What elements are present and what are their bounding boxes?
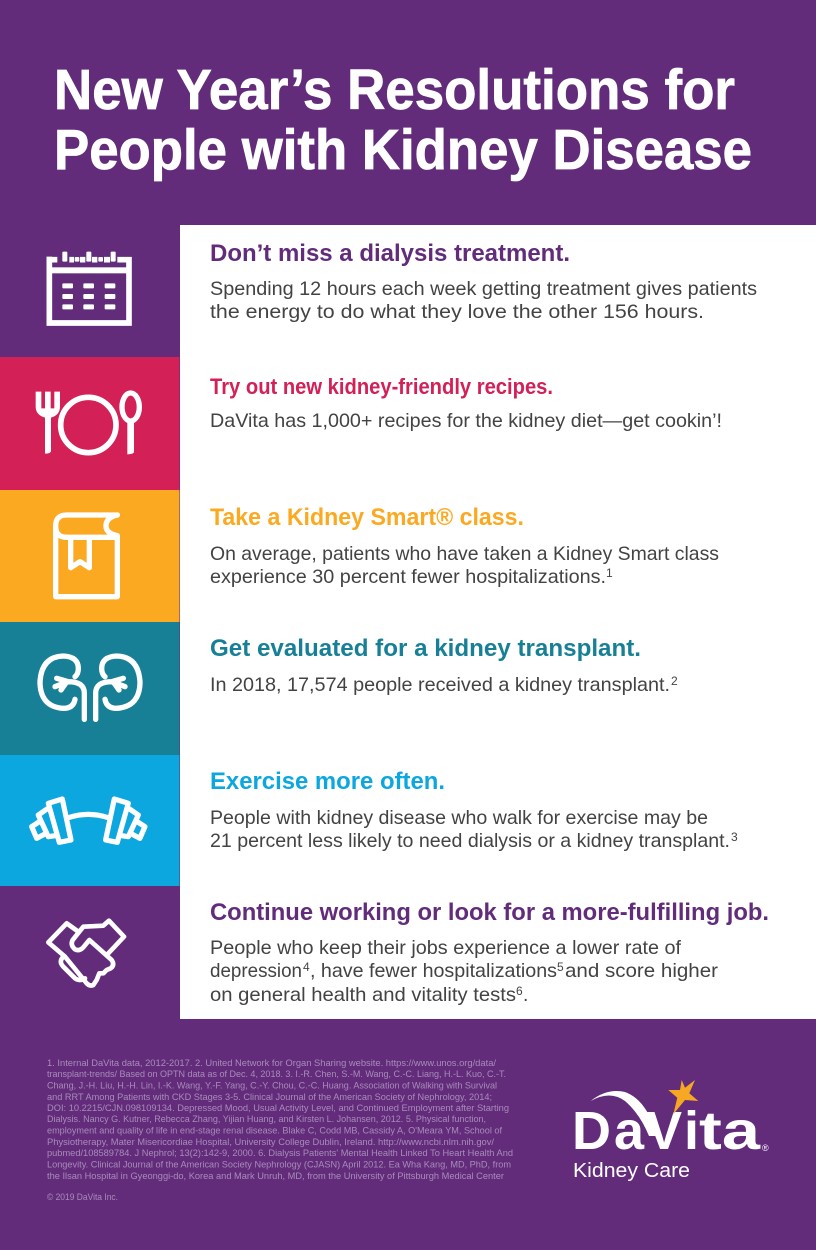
text: continue working: 5	[557, 960, 564, 974]
title: New Year’s Resolutions for	[54, 58, 735, 122]
footnotes: and RRT Among Patients with CKD Stages 3-5. Clinical Journal of the American Society of Nephrology, 2014;	[47, 1091, 492, 1102]
text: exercise more often: People with kidney disease who walk for exercise may be	[210, 808, 708, 829]
text: don't miss a dialysis treatment: the energy to do what they love the other 156 hours.	[210, 302, 704, 323]
footnotes: employment and quality of life in end-stage renal disease. Blake C, Codd MB, Cassidy A, O'Meara YM, School of	[47, 1124, 502, 1136]
text: kidney smart class: experience 30 percent fewer hospitalizations.	[210, 567, 606, 588]
icon: dumbbell	[32, 799, 145, 842]
text: kidney transplant: In 2018, 17,574 people received a kidney transplant.	[210, 675, 670, 696]
text: continue working	[210, 899, 769, 1006]
text: kidney-friendly recipes	[210, 374, 722, 432]
text: kidney smart class: Take a Kidney Smart® class.	[210, 504, 524, 531]
title	[54, 58, 752, 182]
text: continue working: and score higher	[565, 961, 719, 982]
logo: DaVita Kidney Care: ®	[762, 1143, 769, 1153]
text: continue working: 6	[516, 984, 523, 998]
footnotes: Dialysis. Nancy G. Kutner, Rebecca Zhang, Yijian Huang, and Kirsten L. Johansen, 2012. 5. Physical function,	[47, 1113, 486, 1124]
footnotes: Chang, J.-H. Liu, H.-H. Lin, I.-K. Wang, Y.-F. Yang, C.-Y. Chou, C.-C. Huang. Association of Walking with Survival	[47, 1080, 497, 1090]
footnotes: transplant-trends/ Based on OPTN data as of Dec. 4, 2018. 3. I.-R. Chen, S.-M. Wang, C.-C. Liang, H.-L. Kuo, C.-T.	[47, 1068, 506, 1079]
text: exercise more often: 21 percent less likely to need dialysis or a kidney transplant.	[210, 831, 730, 852]
logo: DaVita Kidney Care: D	[572, 1101, 611, 1161]
logo star	[668, 1080, 698, 1114]
text: continue working: depression	[210, 961, 302, 982]
text: don't miss a dialysis treatment: Spending 12 hours each week getting treatment gives patients	[210, 279, 757, 300]
icon: book	[56, 515, 117, 597]
footnotes: Physiotherapy, Mater Misericordiae Hospital, University College Dublin, Ireland. http://www.ncbi.nlm.nih.gov/	[47, 1136, 494, 1147]
text: kidney smart class: On average, patients who have taken a Kidney Smart class	[210, 544, 719, 565]
text: exercise more often: Exercise more often.	[210, 768, 445, 795]
icon: handshake	[48, 921, 124, 986]
text: kidney smart class	[210, 504, 719, 588]
text: kidney transplant: 2	[671, 674, 678, 688]
icon: kidneys	[40, 656, 140, 719]
text: continue working: People who keep their jobs experience a lower rate of	[210, 938, 682, 959]
text: kidney transplant	[210, 635, 678, 696]
logo swoosh	[591, 1091, 657, 1136]
text: don't miss a dialysis treatment	[210, 240, 757, 323]
text: continue working: 4	[303, 960, 310, 974]
icon: plate and cutlery	[36, 392, 139, 454]
text: exercise more often: 3	[731, 830, 738, 844]
logo: DaVita Kidney Care: i	[684, 1101, 699, 1161]
footnotes: the Ilsan Hospital in Gyeonggi-do, Korea and Mark Unruh, MD, from the University of Pittsburgh Medical Center	[47, 1170, 504, 1181]
title: People with Kidney Disease	[54, 118, 752, 182]
panel: icon colour column	[0, 225, 180, 1019]
logo: DaVita Kidney Care	[572, 1080, 769, 1182]
footnotes: pubmed/108589784. J Nephrol; 13(2):142-9, 2000. 6. Dialysis Patients' Mental Health Linked To Heart Health And	[47, 1147, 513, 1158]
footnotes: DOI: 10.2215/CJN.098109134. Depressed Mood, Usual Activity Level, and Continued Employment after Starting	[47, 1102, 509, 1113]
text: continue working: , have fewer hospitalizations	[310, 961, 557, 982]
footnotes: 1. Internal DaVita data, 2012-2017. 2. United Network for Organ Sharing website. https://www.unos.org/data/	[47, 1057, 496, 1068]
text: continue working: Continue working or look for a more-fulfilling job.	[210, 899, 769, 926]
text: kidney-friendly recipes: DaVita has 1,000+ recipes for the kidney diet—get cookin’!	[210, 411, 722, 432]
footnotes: Longevity. Clinical Journal of the American Society Nephrology (CJASN) April 2012. Ea Wha Kang, MD, PhD, from	[47, 1158, 511, 1170]
logo: DaVita Kidney Care: a	[614, 1101, 645, 1161]
footnotes	[47, 1057, 513, 1202]
white content panel	[180, 225, 816, 1019]
logo: DaVita Kidney Care: ta	[699, 1101, 761, 1161]
footnotes: © 2019 DaVita Inc.	[47, 1191, 118, 1202]
text: kidney-friendly recipes: Try out new kidney-friendly recipes.	[210, 374, 553, 399]
text: kidney transplant: Get evaluated for a kidney transplant.	[210, 635, 641, 662]
text: kidney smart class: 1	[606, 566, 613, 580]
logo: DaVita Kidney Care: Kidney Care	[573, 1160, 690, 1182]
text: continue working: .	[523, 985, 528, 1006]
text: continue working: on general health and vitality tests	[210, 985, 516, 1006]
logo: DaVita Kidney Care: V	[646, 1101, 682, 1161]
text: don't miss a dialysis treatment: Don’t miss a dialysis treatment.	[210, 240, 570, 267]
text: exercise more often	[210, 768, 738, 852]
icon: calendar	[49, 252, 129, 323]
